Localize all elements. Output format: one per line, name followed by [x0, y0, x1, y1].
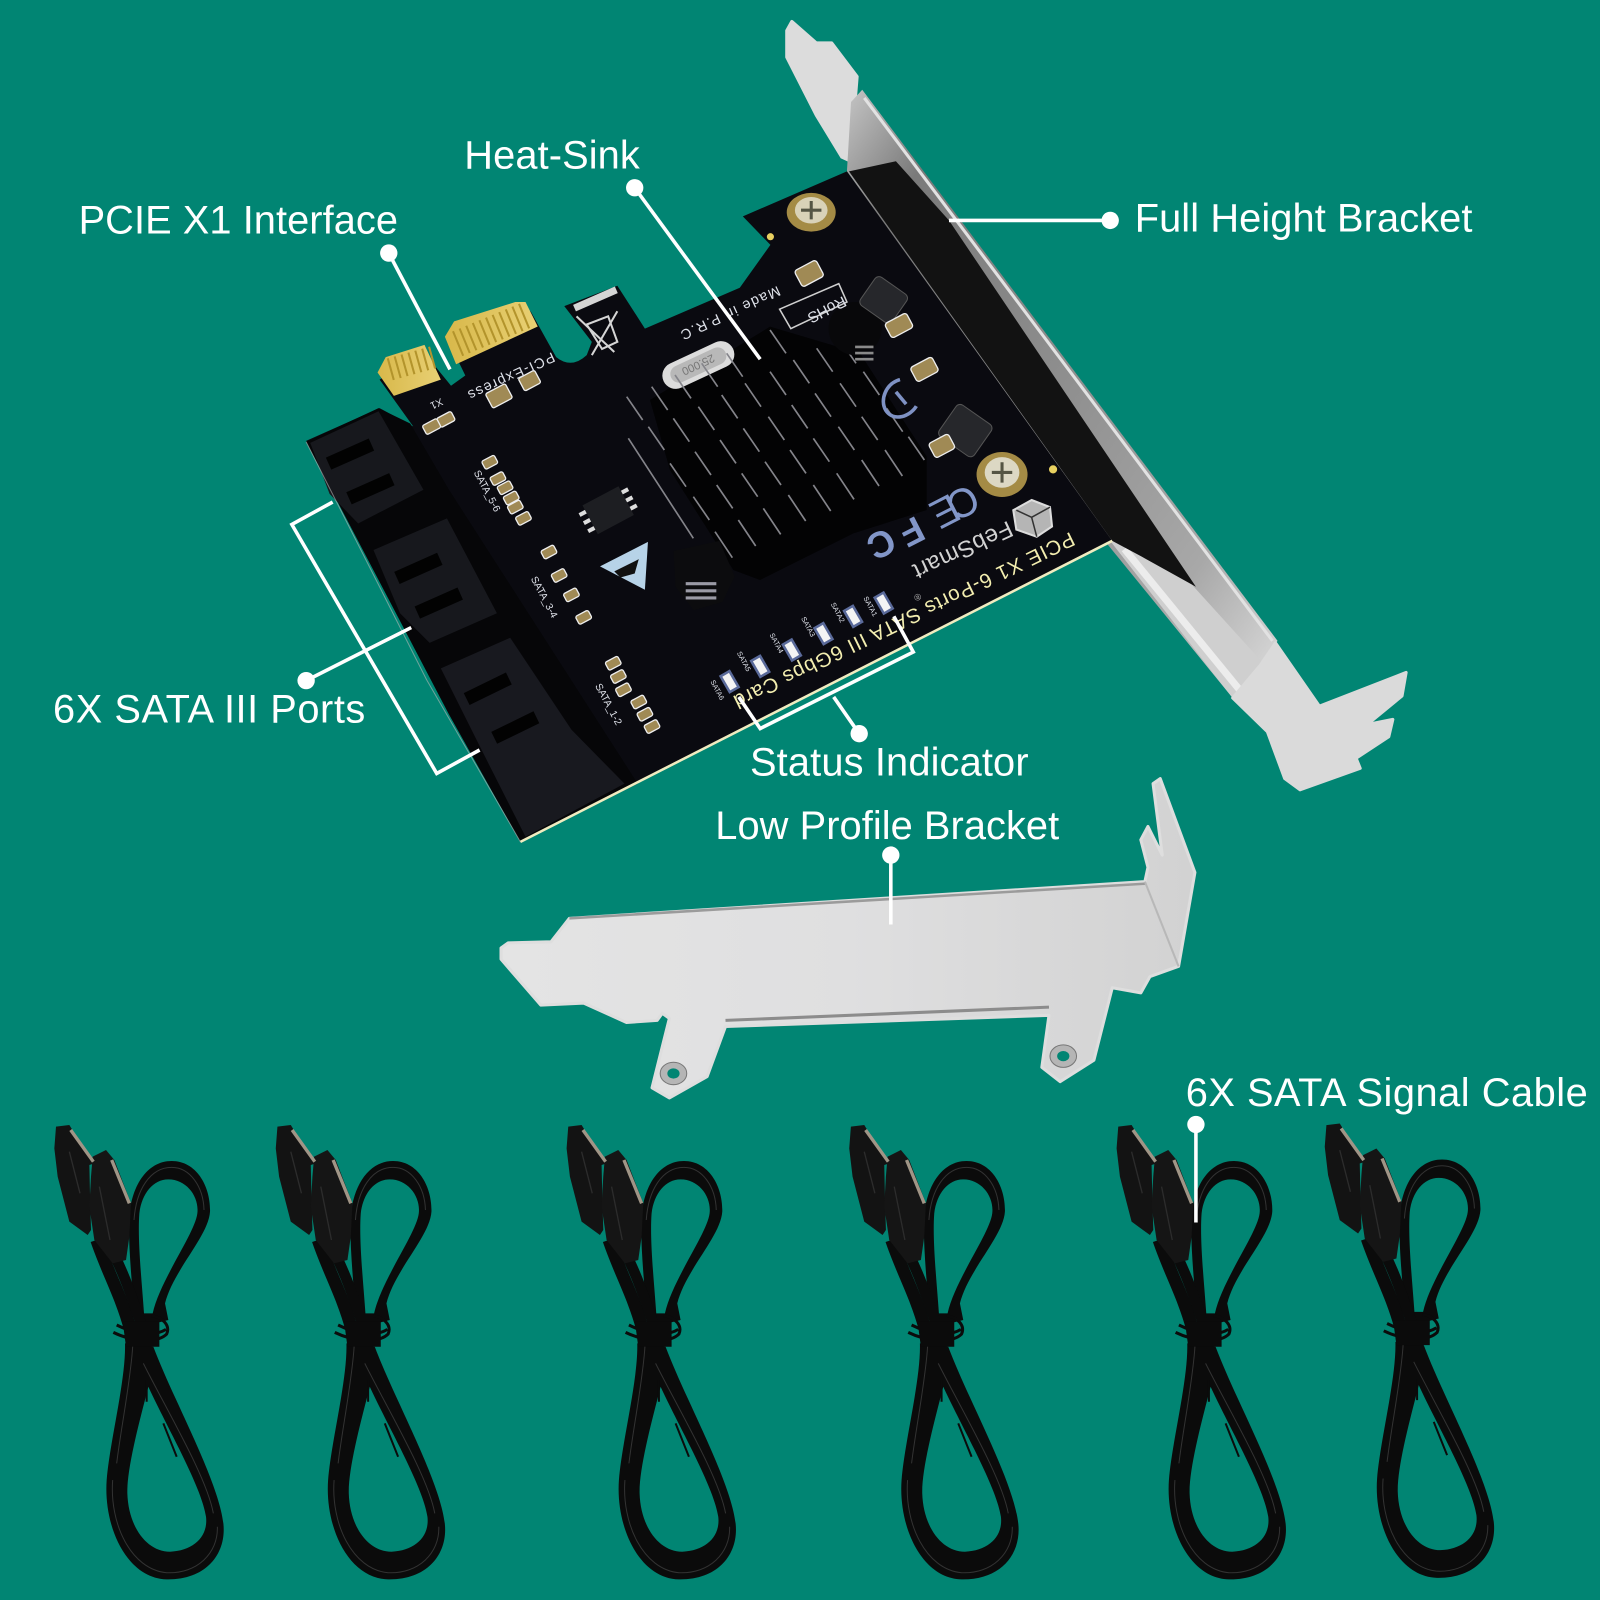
- callout: pcie interface: [79, 199, 450, 369]
- fin lines: [627, 330, 924, 558]
- fcc and ce marks: [860, 475, 987, 568]
- callout: pcie interface: PCIE X1 Interface: [79, 199, 398, 243]
- fcc and ce marks: E: [923, 485, 968, 538]
- callout: status indicator: Status Indicator: [750, 741, 1029, 785]
- callout: full height bracket: [949, 197, 1472, 241]
- fcc and ce marks: C: [860, 520, 902, 568]
- pcb silk text: PCI-Express: [465, 348, 557, 403]
- heat sink spring pins: [673, 302, 882, 610]
- low profile bracket: [501, 779, 1195, 1098]
- bracket top tab: [787, 21, 857, 163]
- rohs mark: [780, 284, 849, 329]
- fcc and ce marks: C: [940, 475, 987, 529]
- inductors: [858, 275, 994, 459]
- edge highlight: [520, 541, 1112, 842]
- cable 1: [54, 1125, 224, 1579]
- callout: signal cable: 6X SATA Signal Cable: [1186, 1071, 1588, 1115]
- status LEDs: [708, 593, 893, 702]
- bracket lower silver section: [1110, 531, 1263, 698]
- pcb silk text: SATA_3-4: [528, 575, 559, 620]
- bracket bottom tab: [1233, 643, 1406, 790]
- callout: full height bracket: Full Height Bracket: [1135, 197, 1472, 241]
- callout: sata ports: 6X SATA III Ports: [53, 687, 365, 731]
- pcb silk text: SATA_5-6: [471, 469, 502, 514]
- cable 6: [1325, 1123, 1494, 1578]
- screws: [767, 193, 1057, 497]
- febsmart logo: [909, 500, 1052, 603]
- sata connectors: [306, 408, 638, 842]
- pcb silk text: PCIE X1 6-Ports SATA III 6Gbps Card: [730, 527, 1078, 712]
- full height bracket: [787, 21, 1406, 790]
- pcb silk text: [428, 282, 1078, 728]
- heat sink: [627, 327, 927, 580]
- gold fingers: [378, 302, 538, 396]
- pcb body: [306, 171, 1112, 842]
- febsmart logo: ®: [912, 591, 923, 603]
- callout: status indicator: [739, 616, 1029, 785]
- status LEDs: SATA3: [799, 616, 816, 638]
- cable 3: [567, 1125, 736, 1579]
- callout: low profile bracket: [715, 804, 1059, 924]
- small capacitors and pads: [422, 260, 956, 734]
- fcc and ce marks: F: [892, 508, 931, 555]
- status LEDs: SATA5: [735, 650, 752, 673]
- crystal: 25.000: [680, 351, 716, 377]
- status LEDs: SATA6: [708, 679, 726, 702]
- cable 2: [276, 1125, 445, 1579]
- pcb board: [306, 171, 1112, 842]
- ul mark: [883, 380, 916, 417]
- bracket flange strip: [847, 90, 1278, 698]
- status LEDs: SATA4: [768, 632, 785, 655]
- pcb silk text: Made in P.R.C: [678, 282, 783, 342]
- bracket dark reflection band: [849, 161, 1196, 587]
- callout: signal cable: [1186, 1071, 1588, 1222]
- pcb silk text: SATA_1-2: [592, 682, 623, 728]
- cable 5: [1117, 1125, 1286, 1579]
- status LEDs: SATA1: [861, 595, 879, 618]
- callout: heat-sink: Heat-Sink: [464, 133, 640, 177]
- esd triangle: [600, 542, 648, 590]
- pcb silk text: X1: [428, 395, 444, 411]
- status LEDs: SATA2: [829, 601, 846, 624]
- callout: low profile bracket: Low Profile Bracket: [715, 804, 1059, 848]
- weee symbol: [574, 290, 617, 355]
- ic chip: [576, 483, 640, 538]
- rohs mark: RoHS: [805, 292, 849, 326]
- crystal: [658, 337, 739, 393]
- callout: heat-sink: [464, 133, 760, 359]
- febsmart logo: FebSmart: [909, 516, 1017, 585]
- cable 4: [849, 1125, 1019, 1579]
- callout: sata ports: [53, 502, 480, 773]
